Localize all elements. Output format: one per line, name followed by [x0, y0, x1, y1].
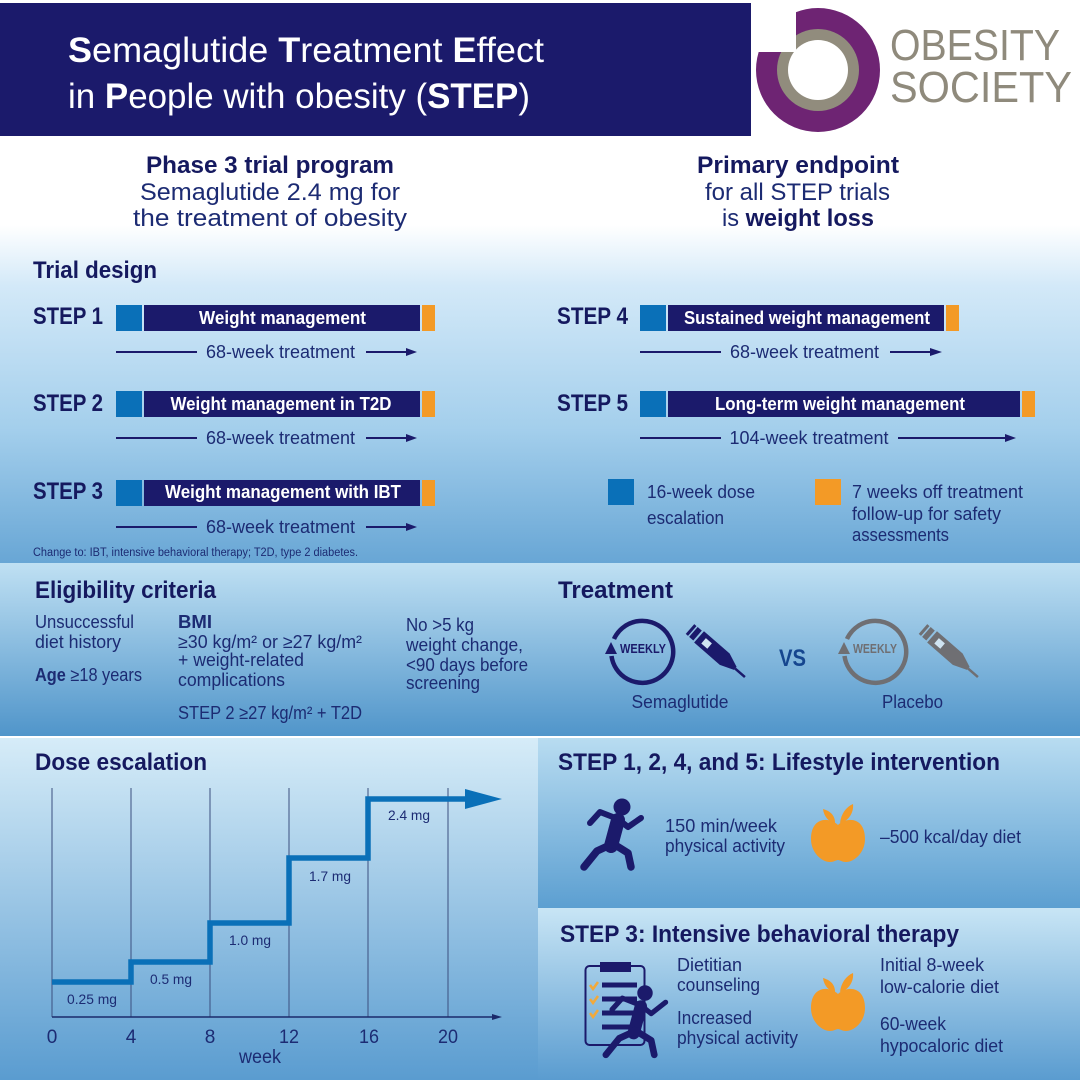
- title banner: [0, 3, 751, 136]
- chart: dose escalation steps: 8: [205, 1027, 215, 1048]
- criteria: weight change: weight change,: [405, 635, 523, 655]
- text: diet: –500 kcal/day diet: [880, 827, 1021, 847]
- icon: weekly cycle placebo: WEEKLY: [853, 641, 897, 656]
- panel: dose escalation: [0, 738, 538, 1080]
- text: physical activity: [665, 816, 785, 856]
- legend: 7 weeks off treatment: follow-up for safety: [852, 504, 1001, 524]
- STEP 4 row: [557, 303, 959, 362]
- title: [68, 31, 544, 116]
- text: counseling and activity: Increased: [677, 1008, 752, 1028]
- STEP 2 row: STEP 2: [33, 390, 103, 417]
- icon: apple: [811, 973, 865, 1031]
- icon: weekly cycle placebo: [838, 621, 906, 683]
- chart: dose escalation steps: 1.7 mg: [309, 868, 351, 884]
- text block: phase 3 trial program: Semaglutide 2.4 mg for: [140, 179, 400, 206]
- title: Semaglutide Treatment Effect: [68, 31, 544, 70]
- VS: VS: [779, 645, 806, 672]
- STEP 4 row: Sustained weight management: [684, 308, 930, 328]
- criteria: BMI: BMI: [178, 612, 212, 632]
- text block: primary endpoint: Primary endpoint: [697, 152, 899, 179]
- logo: Obesity Society: OBESITY: [890, 21, 1060, 70]
- STEP 5 row: Long-term weight management: [715, 394, 965, 414]
- text: diet phases: Initial 8-week: [880, 955, 985, 975]
- chart: dose escalation steps: 0: [47, 1027, 57, 1048]
- panel: trial design: [0, 225, 1080, 563]
- legend: 7 weeks off treatment: 7 weeks off treatment: [852, 482, 1023, 502]
- STEP 3 row: STEP 3: [33, 478, 103, 505]
- chart: dose escalation steps: 0.5 mg: [150, 971, 192, 987]
- footnote: Change to: IBT, intensive behavioral therapy; T2D, type 2 diabetes.: [33, 547, 358, 559]
- STEP 4 row: 68-week treatment: [730, 342, 879, 362]
- criteria: diet history and age: diet history: [35, 632, 121, 652]
- text: counseling and activity: counseling: [677, 975, 760, 995]
- text: counseling and activity: [677, 955, 798, 1048]
- text block: phase 3 trial program: [133, 152, 407, 232]
- text: diet phases: [880, 955, 1003, 1056]
- criteria: diet history and age: [35, 612, 142, 685]
- heading: dose escalation: Dose escalation: [35, 749, 207, 776]
- chart: dose escalation steps: week: [238, 1047, 281, 1068]
- STEP 1 row: [33, 303, 435, 362]
- STEP 1 row: Weight management: [199, 308, 366, 328]
- chart: dose escalation steps: 20: [438, 1027, 458, 1048]
- panel: intensive behavioral therapy: [538, 908, 1080, 1080]
- title: in People with obesity (STEP): [68, 77, 530, 116]
- criteria: diet history and age: Unsuccessful: [35, 612, 134, 632]
- criteria: BMI: [178, 612, 362, 723]
- logo: Obesity Society: SOCIETY: [890, 63, 1072, 112]
- chart: dose escalation steps: 16: [359, 1027, 379, 1048]
- legend: 16-week dose escalation: [608, 479, 755, 528]
- legend: 7 weeks off treatment: [815, 479, 1023, 545]
- icon: weekly cycle semaglutide: [605, 621, 673, 683]
- STEP 2 row: [33, 390, 435, 448]
- text: diet phases: hypocaloric diet: [880, 1036, 1003, 1056]
- text: counseling and activity: physical activity: [677, 1028, 798, 1048]
- chart: dose escalation steps: 12: [279, 1027, 299, 1048]
- STEP 4 row: STEP 4: [557, 303, 629, 330]
- criteria: weight change: No >5 kg: [406, 615, 474, 635]
- heading: treatment: Treatment: [558, 577, 673, 604]
- chart: dose escalation steps: 0.25 mg: [67, 991, 117, 1007]
- text: counseling and activity: Dietitian: [677, 955, 742, 975]
- STEP 3 row: [33, 478, 435, 537]
- text block: primary endpoint: [697, 152, 899, 232]
- chart: dose escalation steps: 4: [126, 1027, 137, 1048]
- text: diet phases: low-calorie diet: [880, 977, 999, 997]
- icon: pen placebo: [918, 623, 983, 683]
- icon: clipboard with runner: [586, 962, 666, 1055]
- text: physical activity: physical activity: [665, 836, 785, 856]
- STEP 1 row: 68-week treatment: [206, 342, 355, 362]
- text block: primary endpoint: for all STEP trials: [705, 179, 890, 206]
- text block: phase 3 trial program: Phase 3 trial program: [146, 152, 394, 179]
- panel: eligibility criteria and treatment: [0, 563, 1080, 736]
- chart: dose escalation steps: [47, 788, 502, 1068]
- criteria: diet history and age: Age ≥18 years: [35, 665, 142, 685]
- STEP 2 row: 68-week treatment: [206, 428, 355, 448]
- STEP 5 row: STEP 5: [557, 390, 628, 417]
- legend: 7 weeks off treatment: assessments: [852, 525, 949, 545]
- panel: lifestyle intervention: [538, 738, 1080, 908]
- heading: intensive behavioral therapy: STEP 3: Intensive behavioral therapy: [560, 921, 960, 948]
- STEP 5 row: 104-week treatment: [730, 428, 888, 448]
- icon: apple: [811, 804, 865, 862]
- heading: lifestyle intervention: STEP 1, 2, 4, and 5: Lifestyle intervention: [558, 749, 1000, 776]
- heading: trial design: Trial design: [33, 257, 157, 284]
- criteria: BMI: ≥30 kg/m² or ≥27 kg/m²: [178, 632, 362, 652]
- label: placebo: Placebo: [882, 692, 943, 712]
- text block: phase 3 trial program: the treatment of obesity: [133, 205, 407, 232]
- criteria: BMI: + weight-related: [178, 650, 304, 670]
- chart: dose escalation steps: 2.4 mg: [388, 807, 430, 823]
- logo: Obesity Society: [752, 0, 1072, 132]
- legend: 16-week dose escalation: 16-week dose: [647, 482, 755, 502]
- criteria: BMI: complications: [178, 670, 285, 690]
- legend: 16-week dose escalation: escalation: [647, 508, 724, 528]
- criteria: weight change: [405, 615, 528, 693]
- STEP 5 row: [557, 390, 1035, 448]
- criteria: weight change: <90 days before: [406, 655, 528, 675]
- text block: primary endpoint: is weight loss: [722, 205, 874, 232]
- STEP 3 row: Weight management with IBT: [165, 482, 401, 502]
- icon: weekly cycle semaglutide: WEEKLY: [620, 641, 666, 656]
- heading: eligibility criteria: Eligibility criteria: [35, 577, 217, 604]
- label: semaglutide: Semaglutide: [632, 692, 728, 712]
- STEP 1 row: STEP 1: [33, 303, 103, 330]
- text: diet phases: 60-week: [880, 1014, 947, 1034]
- text: physical activity: 150 min/week: [665, 816, 778, 836]
- icon: pen semaglutide: [685, 623, 750, 683]
- chart: dose escalation steps: 1.0 mg: [229, 932, 271, 948]
- STEP 2 row: Weight management in T2D: [170, 394, 392, 414]
- STEP 3 row: 68-week treatment: [206, 517, 355, 537]
- criteria: weight change: screening: [406, 673, 480, 693]
- icon: runner: [584, 798, 641, 867]
- criteria: BMI: STEP 2 ≥27 kg/m² + T2D: [178, 703, 362, 723]
